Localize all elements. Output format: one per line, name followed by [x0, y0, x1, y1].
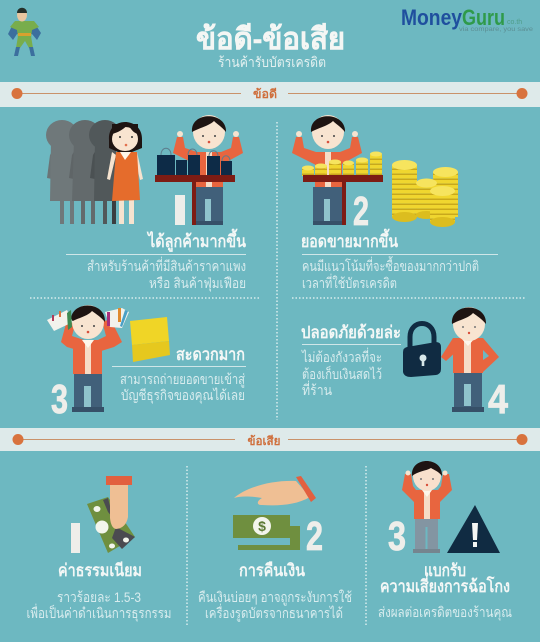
icon: padlock: [403, 324, 441, 377]
body text: ที่ร้าน: [302, 381, 332, 398]
icon: shopkeeper holding cards: [47, 305, 129, 412]
panel: pro 1 more customers: [46, 115, 246, 292]
number 2: 2: [306, 513, 323, 559]
icon: superhero mascot: [8, 8, 41, 56]
credit cards right: [105, 308, 129, 328]
number 1: [71, 523, 80, 553]
body text: บัญชีธุรกิจของคุณได้เลย: [121, 387, 245, 404]
logo: MoneyGuru: co.th: [507, 19, 522, 26]
credit cards left: [47, 310, 73, 331]
section band: pros: ข้อดี: [253, 87, 277, 101]
panel: pro 4 safer: [301, 307, 508, 422]
body text: [26, 589, 172, 622]
body text: สำหรับร้านค้าที่มีสินค้าราคาแพง: [87, 257, 246, 274]
heading: ค่าธรรมเนียม: [58, 560, 142, 580]
panel: pro 3 convenient: [47, 305, 246, 422]
number 4: 4: [488, 376, 508, 422]
heading: แบกรับ: [424, 561, 466, 580]
title: ข้อดี-ข้อเสีย: [196, 23, 345, 56]
section band: pros: [0, 82, 540, 107]
coins on table: [302, 152, 382, 176]
body text: [87, 257, 246, 292]
body text: คืนเงินบ่อยๆ อาจถูกระงับการใช้: [198, 589, 352, 606]
logo: MoneyGuru: Guru: [462, 5, 505, 30]
shopping bags: [157, 155, 232, 175]
panel: pro 2 higher sales: [292, 115, 498, 291]
icon: worried shopkeeper: [402, 461, 452, 553]
body text: สามารถถ่ายยอดขายเข้าสู่: [120, 371, 245, 388]
table: [303, 175, 383, 182]
logo: MoneyGuru: [401, 5, 534, 33]
body text: หรือ สินค้าฟุ่มเฟือย: [149, 275, 246, 292]
icon: shopkeeper with coins: [292, 115, 383, 225]
number 1: [175, 195, 185, 225]
body text: เวลาที่ใช้บัตรเครดิต: [302, 274, 397, 291]
icon: stacks of gold coins: [392, 160, 458, 227]
body text: เพื่อเป็นค่าดำเนินการธุรกรรม: [26, 604, 172, 622]
panel: con 1 fees: [26, 476, 172, 622]
section band: cons: ข้อเสีย: [248, 434, 280, 448]
body text: [198, 589, 352, 622]
icon: grey customer silhouettes: [46, 120, 121, 224]
panel: con 3 fraud risk: [378, 461, 512, 621]
heading: ยอดขายมากขึ้น: [301, 228, 398, 251]
body text: [301, 348, 382, 398]
icon: hand over cash: [233, 476, 316, 550]
heading: ได้ลูกค้ามากขึ้น: [146, 228, 246, 253]
body text: ไม่ต้องกังวลที่จะ: [301, 348, 382, 365]
logo: MoneyGuru: via compare, you save: [459, 27, 534, 33]
icon: shopkeeper with shopping bags: [155, 115, 243, 225]
body text: ราวร้อยละ 1.5-3: [57, 589, 141, 605]
number 2: 2: [353, 188, 369, 234]
panel: con 2 chargebacks: [198, 476, 352, 622]
body text: [120, 371, 245, 404]
icon: shopkeeper with padlock: [441, 307, 499, 412]
body text: คนมีแนวโน้มที่จะซื้อของมากกว่าปกติ: [302, 256, 479, 274]
heading: สะดวกมาก: [176, 345, 245, 364]
heading: ปลอดภัยด้วยล่ะ: [301, 323, 401, 342]
body text: เครื่องรูดบัตรจากธนาคารได้: [205, 604, 343, 622]
subtitle: ร้านค้ารับบัตรเครดิต: [218, 54, 326, 70]
number 3: 3: [51, 376, 68, 422]
icon: hand with banknotes: [87, 476, 135, 553]
icon: woman in orange dress: [107, 122, 143, 224]
section band: cons: [0, 428, 540, 451]
dotted dividers: [30, 122, 525, 627]
number 3: 3: [388, 513, 406, 559]
icon: warning triangle: [447, 505, 500, 553]
heading: การคืนเงิน: [239, 560, 305, 580]
icon: yellow card machine: [130, 317, 170, 362]
icon: hand over cash: $: [258, 518, 266, 534]
table: [155, 175, 235, 182]
body text: ต้องเก็บเงินสดไว้: [302, 365, 382, 382]
body text: ส่งผลต่อเครดิตของร้านคุณ: [378, 604, 512, 621]
heading: ความเสี่ยงการฉ้อโกง: [380, 574, 510, 596]
logo: MoneyGuru: Money: [401, 5, 463, 30]
body text: [302, 256, 479, 291]
heading: [380, 561, 510, 596]
